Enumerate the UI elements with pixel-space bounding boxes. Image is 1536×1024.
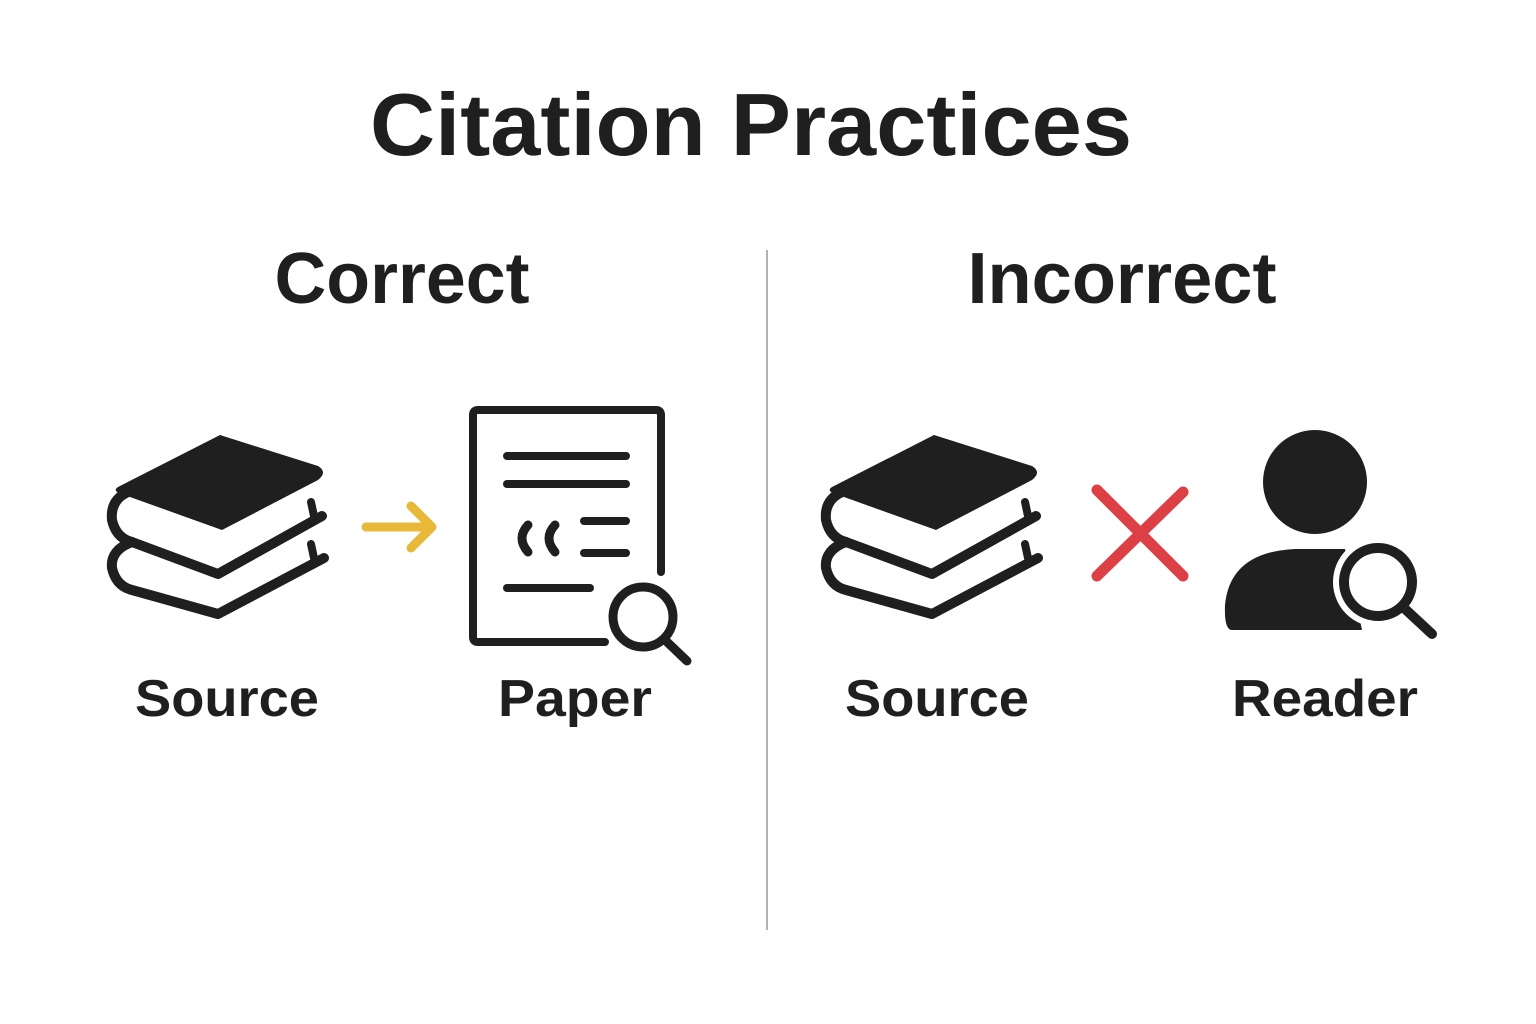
panel: correct	[112, 239, 687, 728]
icon: source books	[826, 435, 1038, 614]
icon: source books	[112, 435, 324, 614]
label: Source: Source	[845, 670, 1029, 728]
heading: Correct: Correct	[274, 239, 530, 319]
label: Reader: Reader	[1232, 670, 1418, 728]
icon: red X	[1097, 490, 1183, 576]
title: Citation Practices	[370, 75, 1132, 174]
divider line	[766, 250, 768, 930]
heading: Incorrect: Incorrect	[968, 239, 1277, 319]
arrow: yellow	[366, 506, 432, 548]
icon: reader with magnifier	[1225, 430, 1432, 634]
label: Paper: Paper	[498, 670, 652, 728]
icon: paper with magnifier	[473, 410, 687, 661]
panel: incorrect	[826, 239, 1432, 728]
label: Source: Source	[135, 670, 319, 728]
